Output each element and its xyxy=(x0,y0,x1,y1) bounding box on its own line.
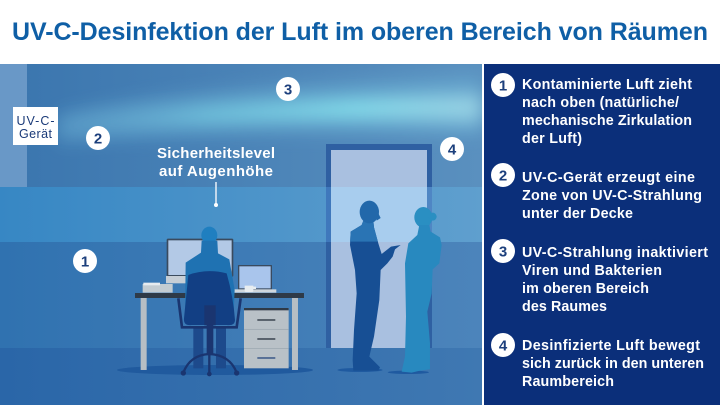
step 2: Zone von UV-C-Strahlung xyxy=(522,188,702,204)
UV-C device label: UV-C- xyxy=(16,114,54,128)
safety level label with pointer: auf Augenhöhe xyxy=(159,163,273,180)
marker 1 xyxy=(73,249,97,273)
desk top xyxy=(135,293,304,298)
woman silhouette xyxy=(402,207,442,373)
step 1: mechanische Zirkulation xyxy=(522,113,692,129)
office chair xyxy=(178,271,241,376)
desk workstation with seated person xyxy=(135,227,304,376)
step 4: Desinfizierte Luft bewegt xyxy=(522,338,700,354)
UV-C radiation beam xyxy=(58,74,482,142)
step 3: des Raumes xyxy=(522,299,607,315)
panel: numbered steps xyxy=(484,64,720,405)
step 4: Raumbereich xyxy=(522,374,614,390)
step 4: sich zurück in den unteren xyxy=(522,356,704,372)
laptop xyxy=(234,265,276,293)
safety level label with pointer xyxy=(157,145,275,207)
step 2: UV-C-Gerät erzeugt eine xyxy=(522,170,695,186)
step 1 xyxy=(491,73,692,147)
drawer cabinet xyxy=(244,308,289,368)
panel: room scene xyxy=(0,64,482,405)
marker 4 xyxy=(440,137,464,161)
coffee cup xyxy=(245,286,256,292)
step 4: 4 xyxy=(499,338,508,354)
marker 2: 2 xyxy=(94,130,102,148)
UV-C device label: Gerät xyxy=(19,127,53,141)
UV-C device label xyxy=(13,107,58,145)
marker 2 xyxy=(86,126,110,150)
step 3: UV-C-Strahlung inaktiviert xyxy=(522,245,708,261)
title: UV-C-Desinfektion der Luft im oberen Bereich von Räumen xyxy=(12,18,708,46)
step 2 xyxy=(491,163,702,222)
step 2: unter der Decke xyxy=(522,206,633,222)
step 3: Viren und Bakterien xyxy=(522,263,662,279)
step 2: 2 xyxy=(499,168,507,184)
two people talking xyxy=(337,201,442,374)
floor shadow under desk xyxy=(117,365,313,375)
marker 3 xyxy=(276,77,300,101)
person from behind xyxy=(185,227,235,368)
step 1: Kontaminierte Luft zieht xyxy=(522,77,692,93)
paper stack xyxy=(143,283,173,293)
desk legs xyxy=(141,298,298,370)
marker 1: 1 xyxy=(81,254,89,270)
step 3: 3 xyxy=(499,244,507,260)
step 3: im oberen Bereich xyxy=(522,281,649,297)
door xyxy=(326,144,432,348)
marker 4: 4 xyxy=(448,142,457,158)
step 1: der Luft) xyxy=(522,131,582,147)
man silhouette xyxy=(350,201,401,371)
safety level label with pointer: Sicherheitslevel xyxy=(157,145,275,162)
step 4 xyxy=(491,333,704,390)
monitor xyxy=(166,239,233,283)
step 1: nach oben (natürliche/ xyxy=(522,95,679,111)
marker 3: 3 xyxy=(284,82,292,98)
step 1: 1 xyxy=(499,78,507,94)
shadows xyxy=(337,368,383,372)
step 3 xyxy=(491,239,708,315)
